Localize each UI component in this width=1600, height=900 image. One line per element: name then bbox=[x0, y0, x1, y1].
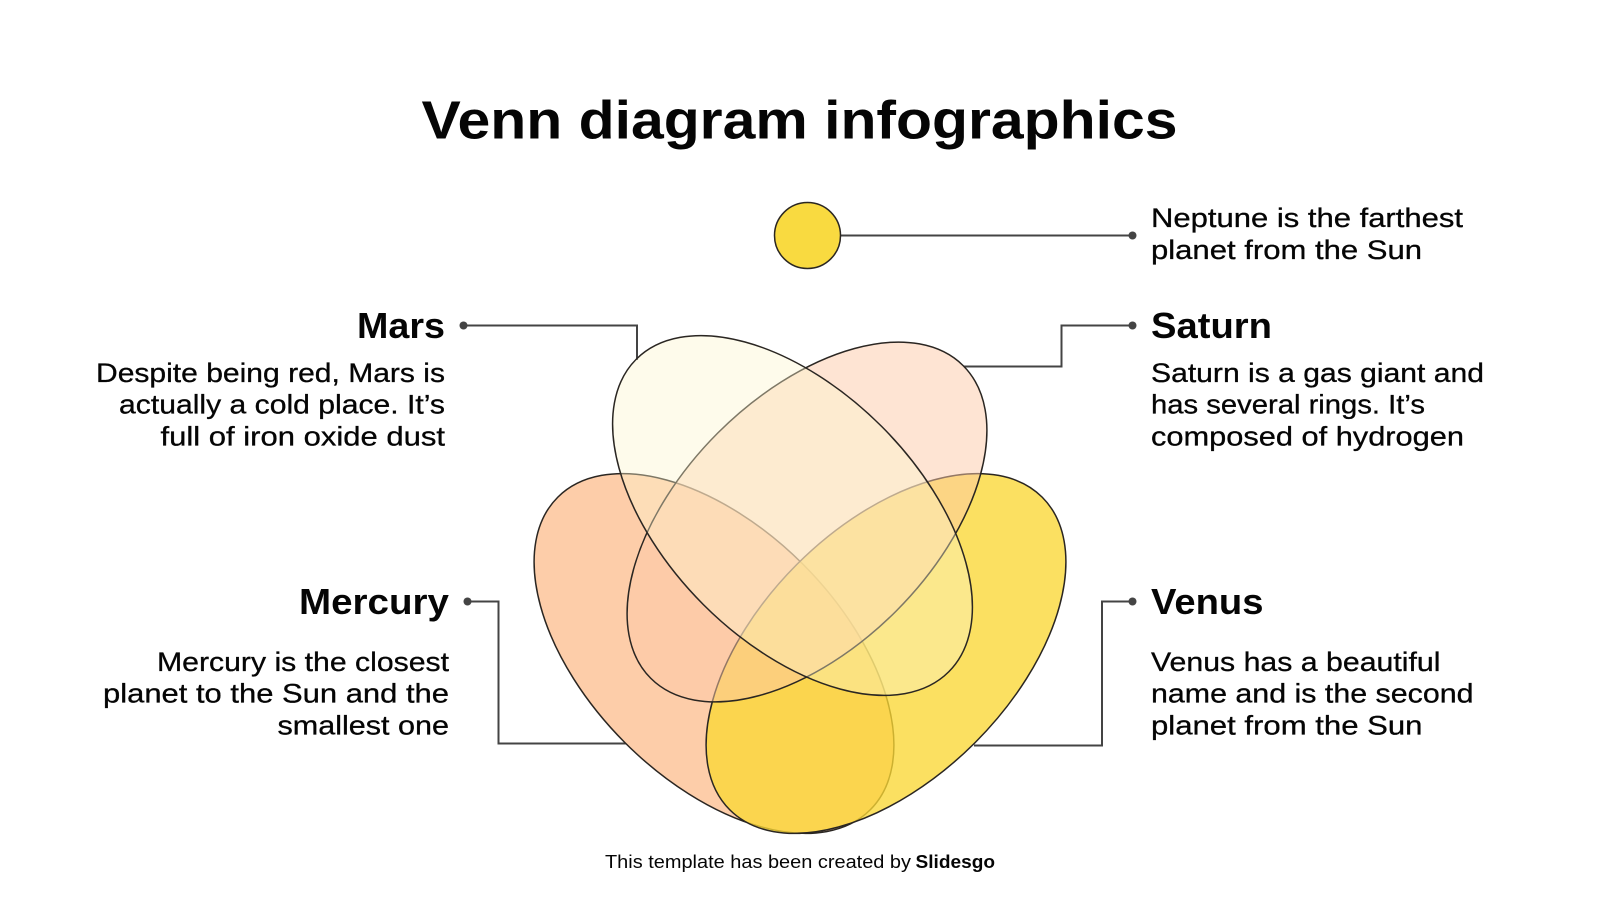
text block: Mercury: planet to the Sun and the bbox=[103, 678, 449, 708]
Venn diagram bbox=[469, 270, 1131, 899]
text block: Saturn bbox=[1151, 305, 1484, 452]
text block: Venus: Venus bbox=[1151, 581, 1264, 622]
ellipse: Venus bbox=[641, 408, 1131, 899]
text block: Mercury: Mercury bbox=[299, 581, 449, 622]
text block: Saturn: Saturn is a gas giant and bbox=[1151, 358, 1484, 388]
ellipse: Mercury bbox=[469, 408, 959, 899]
connector: Venus bbox=[974, 598, 1136, 746]
text block: Saturn: has several rings. It’s bbox=[1151, 390, 1425, 420]
ellipse: Mars bbox=[547, 270, 1038, 761]
text block: Mars: full of iron oxide dust bbox=[160, 422, 446, 452]
text block: Saturn: Saturn bbox=[1151, 305, 1272, 346]
text block: Neptune bbox=[1151, 203, 1464, 265]
text block: Mars: actually a cold place. It’s bbox=[119, 390, 445, 420]
text block: Neptune: planet from the Sun bbox=[1151, 235, 1422, 265]
text block: Venus: Venus has a beautiful bbox=[1151, 647, 1440, 677]
footer credit: Slidesgo bbox=[916, 852, 995, 872]
Neptune circle and connector bbox=[774, 202, 1136, 268]
text block: Mercury: Mercury is the closest bbox=[157, 647, 450, 677]
text block: Neptune: Neptune is the farthest bbox=[1151, 203, 1464, 233]
ellipse: Saturn bbox=[562, 277, 1052, 767]
text block: Mercury bbox=[103, 581, 450, 740]
text block: Mars: Despite being red, Mars is bbox=[96, 358, 445, 388]
connector: Mercury bbox=[464, 598, 626, 744]
text block: Venus bbox=[1151, 581, 1474, 740]
text block: Venus: name and is the second bbox=[1151, 678, 1474, 708]
text block: Mercury: smallest one bbox=[278, 710, 449, 740]
text block: Mars bbox=[96, 305, 446, 452]
title: Venn diagram infographics bbox=[422, 90, 1178, 150]
connector: Mars bbox=[460, 322, 637, 360]
text block: Mars: Mars bbox=[357, 305, 445, 346]
text block: Venus: planet from the Sun bbox=[1151, 710, 1422, 740]
connector: Saturn bbox=[964, 322, 1136, 366]
footer credit: This template has been created by bbox=[605, 852, 911, 872]
text block: Saturn: composed of hydrogen bbox=[1151, 422, 1464, 452]
